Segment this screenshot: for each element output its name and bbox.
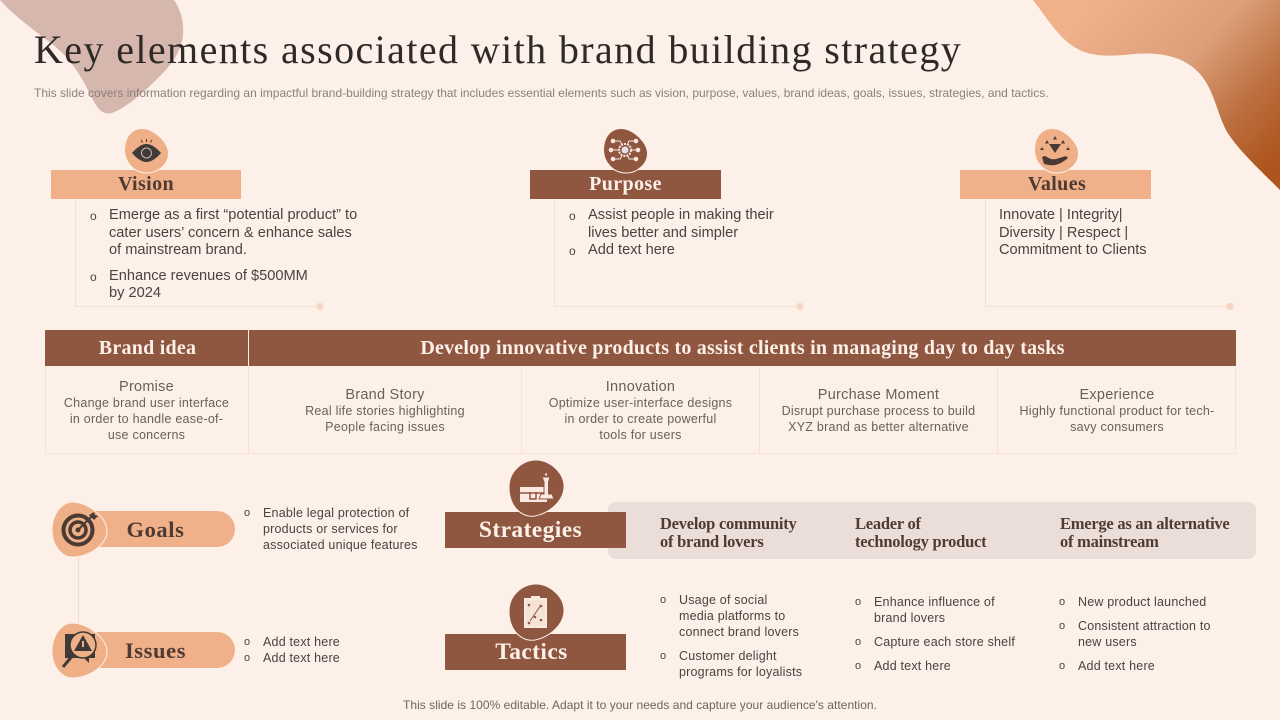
- text: vision bullets: cater users’ concern & enhance sales: [109, 225, 352, 241]
- text: tactics column 3: Add text here: [1078, 659, 1155, 673]
- icon: briefcase and chess piece: [510, 460, 564, 517]
- text: tactics column 1: Usage of social: [679, 593, 767, 607]
- cell: promise: [64, 379, 229, 442]
- text: values list: [999, 207, 1147, 258]
- text: vision bullets: o: [90, 209, 97, 223]
- text: goals bullets: products or services for: [263, 522, 398, 536]
- text: tactics column 2: Enhance influence of: [874, 595, 995, 609]
- icon: tactics clipboard: [510, 584, 564, 641]
- icon: eye: [125, 129, 168, 174]
- text: tactics column 1: o: [660, 650, 666, 662]
- heading: tactics: Tactics: [495, 638, 568, 664]
- panel: strategies band: [608, 502, 1256, 559]
- text: tactics column 1: connect brand lovers: [679, 625, 799, 639]
- text: goals bullets: [244, 506, 418, 552]
- cell: brand story: Real life stories highlighting: [305, 404, 465, 418]
- connector frame: [985, 199, 1234, 310]
- text: values list: Innovate | Integrity|: [999, 207, 1123, 223]
- strategy: leader: technology product: [855, 532, 986, 551]
- icon: hand with diamond and stars: [1035, 129, 1078, 174]
- cell: innovation: in order to create powerful: [565, 412, 716, 426]
- cell: purchase moment: [782, 387, 975, 434]
- cell: purchase moment: XYZ brand as better alternative: [788, 420, 969, 434]
- text: tactics column 1: Customer delight: [679, 649, 777, 663]
- text: issues bullets: Add text here: [263, 651, 340, 665]
- text: goals bullets: associated unique features: [263, 538, 418, 552]
- panel: vision: [51, 129, 357, 310]
- text: goals bullets: o: [244, 507, 250, 519]
- decorative blob: top right: [1033, 0, 1280, 190]
- header: statement: Develop innovative products to assist clients in managing day to day tasks: [420, 337, 1065, 359]
- cell: promise: Change brand user interface: [64, 396, 229, 410]
- heading: tactics: [445, 634, 626, 670]
- text: purpose bullets: lives better and simpler: [588, 225, 738, 241]
- text: tactics column 3: [1059, 595, 1211, 673]
- text: vision bullets: Enhance revenues of $500MM: [109, 268, 308, 284]
- text: vision bullets: [90, 207, 357, 301]
- text: tactics column 2: o: [855, 636, 861, 648]
- text: purpose bullets: Assist people in making their: [588, 207, 774, 223]
- text: purpose bullets: o: [569, 244, 576, 258]
- cell: innovation: tools for users: [599, 428, 682, 442]
- text: vision bullets: Emerge as a first “potential product” to: [109, 207, 357, 223]
- cell: promise: use concerns: [108, 428, 185, 442]
- strategy: community: Develop community: [660, 514, 796, 533]
- text: purpose bullets: [569, 207, 774, 258]
- cell: experience: [1020, 387, 1214, 434]
- header: brand idea: Brand idea: [99, 337, 196, 359]
- icon: magnifier with warning: [52, 623, 108, 678]
- strategy: alternative: Emerge as an alternative: [1060, 514, 1230, 533]
- cell: purchase moment: Purchase Moment: [818, 387, 939, 403]
- strategy: leader: Leader of: [855, 514, 921, 533]
- cell: experience: savy consumers: [1070, 420, 1164, 434]
- heading: values: Values: [1028, 173, 1086, 195]
- panel: purpose: [530, 129, 804, 310]
- text: purpose bullets: o: [569, 209, 576, 223]
- panel: goals: [52, 502, 235, 557]
- text: goals bullets: Enable legal protection of: [263, 506, 409, 520]
- heading: strategies: Strategies: [479, 516, 582, 542]
- heading: purpose: [530, 170, 721, 199]
- strategy: alternative: [1060, 514, 1230, 551]
- icon: target: [52, 502, 108, 557]
- decorative blob: top left: [0, 0, 184, 114]
- text: vision bullets: of mainstream brand.: [109, 242, 247, 258]
- cell: brand story: Brand Story: [345, 387, 425, 403]
- strategies heading with icon: [445, 460, 626, 548]
- text: tactics column 1: o: [660, 594, 666, 606]
- connector: goals to issues: [78, 557, 79, 624]
- connector frame: [75, 199, 324, 310]
- text: tactics column 3: New product launched: [1078, 595, 1206, 609]
- heading: issues: [90, 632, 235, 668]
- cell: promise: Promise: [119, 379, 174, 395]
- text: issues bullets: o: [244, 636, 250, 648]
- text: issues bullets: Add text here: [263, 635, 340, 649]
- panel: values: [960, 129, 1234, 310]
- heading: goals: Goals: [126, 517, 184, 542]
- cell: experience: Highly functional product for tech-: [1020, 404, 1214, 418]
- heading: vision: [51, 170, 241, 199]
- text: issues bullets: [244, 635, 340, 665]
- connector frame: [554, 199, 804, 310]
- text: tactics column 3: o: [1059, 596, 1065, 608]
- text: values list: Diversity | Respect |: [999, 225, 1128, 241]
- text: tactics column 3: o: [1059, 620, 1065, 632]
- title: Key elements associated with brand building strategy: [34, 27, 962, 72]
- strategy: leader: [855, 514, 987, 551]
- text: tactics column 2: [855, 595, 1015, 673]
- text: purpose bullets: Add text here: [588, 242, 675, 258]
- tactics heading with icon: [445, 584, 626, 670]
- header: brand idea: [45, 330, 248, 366]
- text: tactics column 2: o: [855, 660, 861, 672]
- text: tactics column 1: [660, 593, 802, 679]
- icon: network gear: [604, 129, 647, 174]
- cell: brand story: [305, 387, 465, 434]
- text: tactics column 3: Consistent attraction to: [1078, 619, 1211, 633]
- text: issues bullets: o: [244, 652, 250, 664]
- strategy: alternative: of mainstream: [1060, 532, 1159, 551]
- cell: experience: Experience: [1079, 387, 1155, 403]
- cell: innovation: [549, 379, 732, 442]
- table grid lines: [45, 366, 1236, 454]
- table: brand idea: [45, 330, 1236, 454]
- heading: goals: [90, 511, 235, 547]
- text: tactics column 2: o: [855, 596, 861, 608]
- cell: promise: in order to handle ease-of-: [70, 412, 223, 426]
- heading: values: [960, 170, 1151, 199]
- cell: innovation: Innovation: [606, 379, 675, 395]
- header: statement: [249, 330, 1236, 366]
- text: tactics column 1: media platforms to: [679, 609, 785, 623]
- cell: innovation: Optimize user-interface designs: [549, 396, 732, 410]
- text: values list: Commitment to Clients: [999, 242, 1147, 258]
- text: tactics column 1: programs for loyalists: [679, 665, 802, 679]
- panel: issues: [52, 623, 235, 678]
- heading: purpose: Purpose: [589, 173, 662, 195]
- text: tactics column 3: new users: [1078, 635, 1137, 649]
- heading: strategies: [445, 512, 626, 548]
- text: vision bullets: o: [90, 270, 97, 284]
- text: tactics column 2: Add text here: [874, 659, 951, 673]
- cell: brand story: People facing issues: [325, 420, 445, 434]
- subtitle: This slide covers information regarding an impactful brand-building strategy that includes essential elements such as vision, purpose, values, brand ideas, goals, issues, strategies, and tactics.: [34, 86, 1049, 100]
- heading: issues: Issues: [125, 638, 186, 663]
- text: tactics column 2: Capture each store shelf: [874, 635, 1015, 649]
- text: vision bullets: by 2024: [109, 285, 161, 301]
- cell: purchase moment: Disrupt purchase process to build: [782, 404, 975, 418]
- footer note: This slide is 100% editable. Adapt it to your needs and capture your audience's attention.: [403, 698, 877, 712]
- text: tactics column 3: o: [1059, 660, 1065, 672]
- strategy: community: [660, 514, 797, 551]
- strategy: community: of brand lovers: [660, 532, 764, 551]
- heading: vision: Vision: [118, 173, 174, 195]
- text: tactics column 2: brand lovers: [874, 611, 945, 625]
